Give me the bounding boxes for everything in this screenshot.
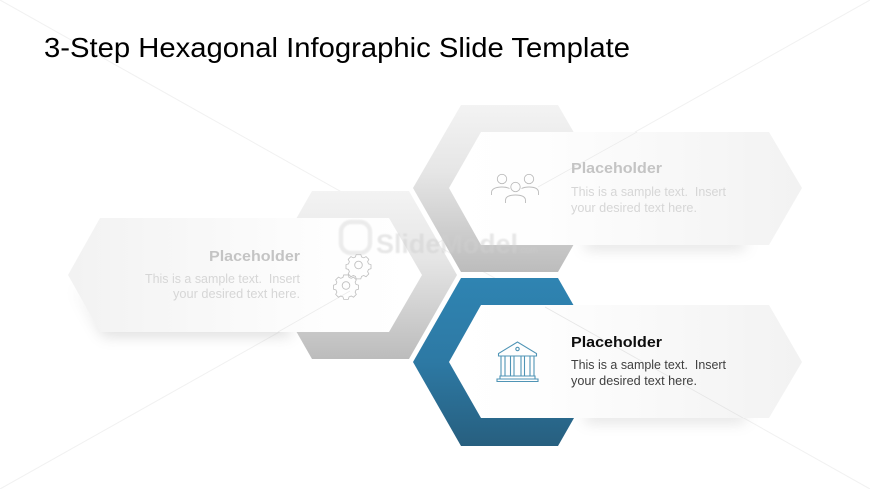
top card text: your desired text here. [571, 201, 697, 215]
bottom card text: your desired text here. [571, 374, 697, 388]
left card text: your desired text here. [173, 287, 300, 301]
title: 3-Step Hexagonal Infographic Slide Template [44, 32, 630, 63]
top card text: This is a sample text. Insert [571, 185, 727, 199]
top card shadow [585, 238, 745, 249]
left arrow card [68, 218, 422, 332]
panel: bottom right step [413, 278, 802, 446]
left card text [145, 248, 301, 301]
bottom arrow card [449, 305, 802, 418]
panel: left step [68, 191, 457, 359]
left card shadow [74, 285, 290, 336]
top hexagon ring [413, 105, 606, 272]
top arrow card [449, 132, 802, 245]
top card text [571, 160, 727, 215]
bottom card text [571, 334, 727, 388]
left card text: This is a sample text. Insert [145, 272, 301, 286]
top card text: Placeholder [571, 160, 662, 177]
bottom card text: This is a sample text. Insert [571, 358, 727, 372]
icon: bank building [497, 342, 538, 382]
left hexagon ring [264, 191, 457, 359]
bottom card shadow [585, 411, 745, 422]
blue hexagon ring [413, 278, 606, 446]
watermark: SlideModel [376, 229, 518, 259]
icon: people [492, 174, 538, 203]
bottom card text: Placeholder [571, 334, 662, 351]
icon: gears [333, 254, 371, 299]
left card text: Placeholder [209, 248, 300, 265]
watermark [341, 222, 538, 259]
panel: top right step [413, 105, 802, 272]
watermark: .com [518, 245, 538, 255]
